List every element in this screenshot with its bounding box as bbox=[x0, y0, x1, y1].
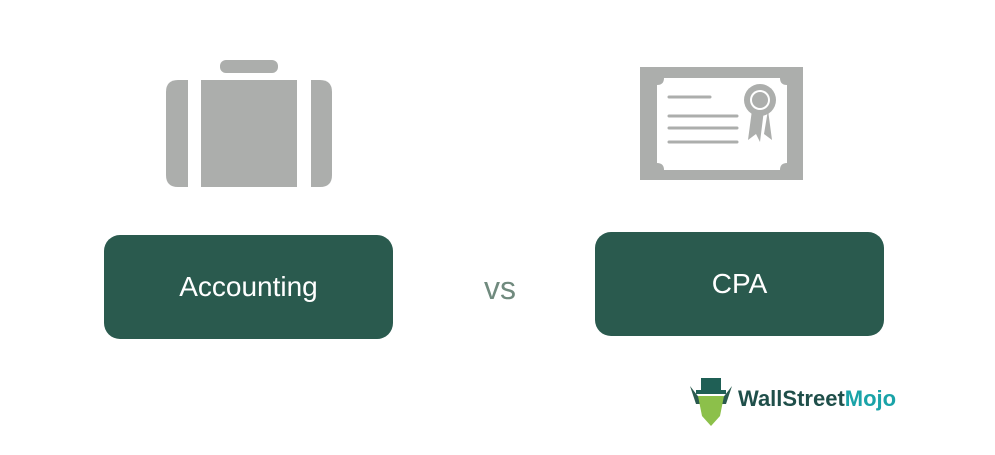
logo text: WallStreetMojo bbox=[738, 386, 896, 411]
box: Accounting bbox=[104, 235, 393, 339]
logo: WallStreetMojo bbox=[690, 378, 896, 426]
vs label: vs bbox=[484, 270, 516, 306]
box: CPA: CPA bbox=[712, 268, 767, 299]
box: Accounting: Accounting bbox=[179, 271, 318, 302]
box: CPA bbox=[595, 232, 884, 336]
icon: logo mascot bbox=[690, 378, 732, 426]
